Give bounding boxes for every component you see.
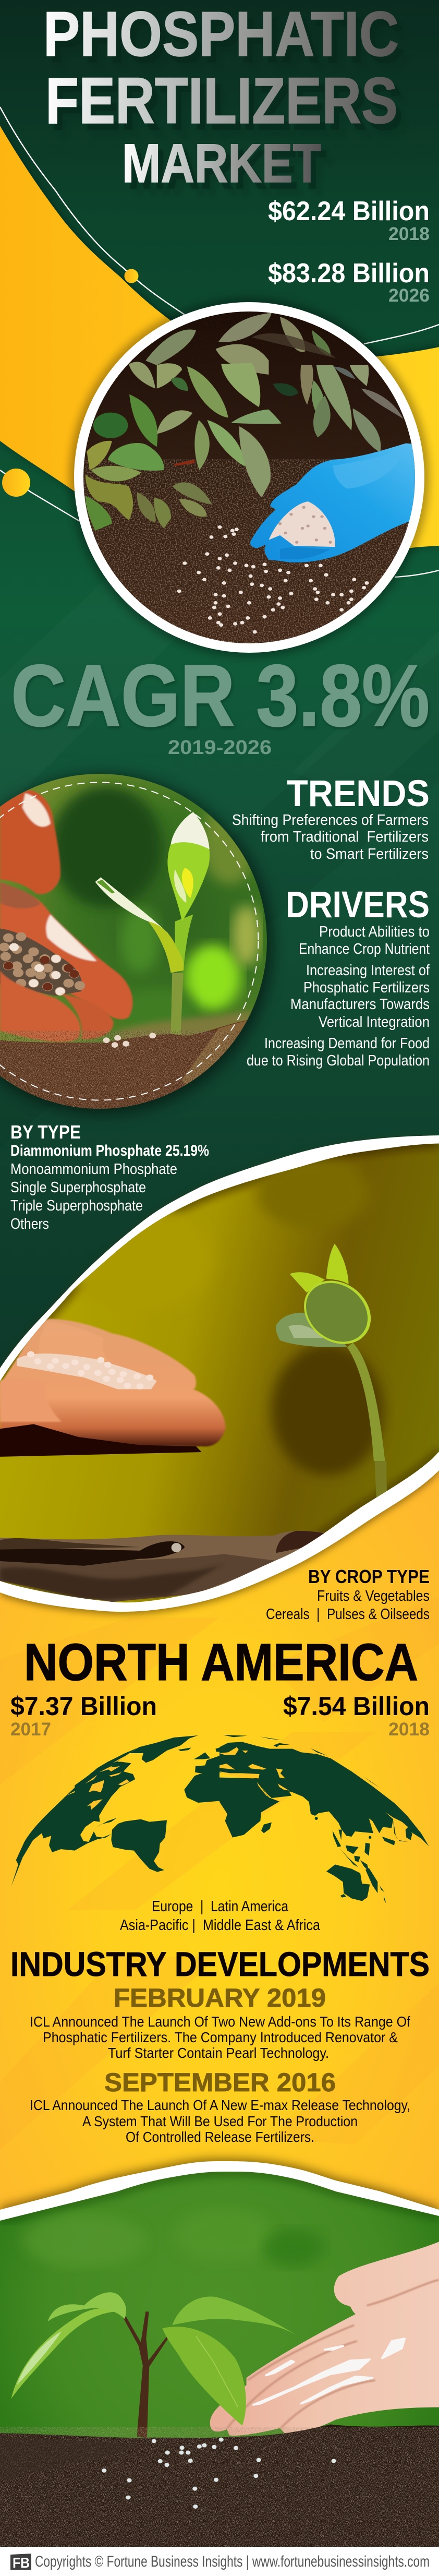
north america 2017 value (10, 1692, 157, 1740)
by type: Diammonium Phosphate 25.19% (10, 1142, 209, 1159)
trends (232, 773, 430, 862)
market value 2026: $83.28 Billion (268, 258, 430, 289)
dashed ring (0, 783, 259, 1100)
by type: Triple Superphosphate (10, 1197, 143, 1214)
north america 2018 value: $7.54 Billion (283, 1692, 430, 1721)
september 2016 development: SEPTEMBER 2016 (104, 2068, 336, 2097)
by type: Single Superphosphate (10, 1179, 146, 1196)
february 2019 development: Turf Starter Contain Pearl Technology. (108, 2045, 329, 2061)
market value 2018: $62.24 Billion (268, 196, 430, 226)
diagonal background stripes (0, 522, 439, 2150)
by type: Others (10, 1216, 49, 1232)
world map globe (11, 1735, 429, 1903)
trends: from Traditional Fertilizers (261, 829, 429, 845)
wide photo: hand and sprout (0, 1135, 439, 1612)
north america 2017 value: $7.37 Billion (10, 1692, 157, 1721)
february 2019 development: Phosphatic Fertilizers. The Company Introduced Renovator & (43, 2029, 398, 2045)
footer bar (0, 2547, 439, 2576)
green background (0, 0, 439, 1461)
market value 2026: 2026 (388, 285, 430, 306)
curved white lines (0, 107, 439, 577)
circular photo: seedling and hand (0, 774, 273, 1115)
circular photo: gloved hand spreading fertilizer (69, 297, 429, 657)
yellow timeline dots (2, 269, 139, 497)
yellow curved band (0, 124, 439, 574)
market value 2018 (268, 196, 430, 244)
other regions: Europe | Latin America (152, 1898, 289, 1915)
CAGR period: 2019-2026 (168, 737, 272, 759)
market value 2018: 2018 (388, 224, 430, 244)
other regions: Asia-Pacific | Middle East & Africa (120, 1917, 321, 1934)
title: MARKET (122, 133, 321, 194)
february 2019 development: FEBRUARY 2019 (114, 1983, 326, 2012)
by type (10, 1121, 209, 1232)
north america 2017 value: 2017 (10, 1719, 51, 1740)
market value 2026 (268, 258, 430, 306)
september 2016 development: A System That Will Be Used For The Production (82, 2113, 358, 2129)
logo icon: FB (13, 2555, 30, 2571)
drivers (247, 884, 430, 1069)
title (43, 0, 399, 194)
north america 2018 value (283, 1692, 430, 1740)
other regions (120, 1898, 321, 1934)
yellow background (0, 1435, 439, 2244)
by crop type (266, 1566, 430, 1623)
by type: BY TYPE (10, 1121, 81, 1143)
trends: to Smart Fertilizers (310, 846, 429, 862)
bottom photo: hand fertilizing plant (0, 2160, 439, 2549)
september 2016 development: Of Controlled Release Fertilizers. (126, 2129, 314, 2145)
white frame (0, 1135, 439, 1612)
february 2019 development (30, 1983, 410, 2061)
trends: TRENDS (287, 773, 430, 814)
september 2016 development (30, 2068, 410, 2145)
by type: Monoammonium Phosphate (10, 1161, 177, 1178)
north america 2018 value: 2018 (388, 1719, 430, 1740)
